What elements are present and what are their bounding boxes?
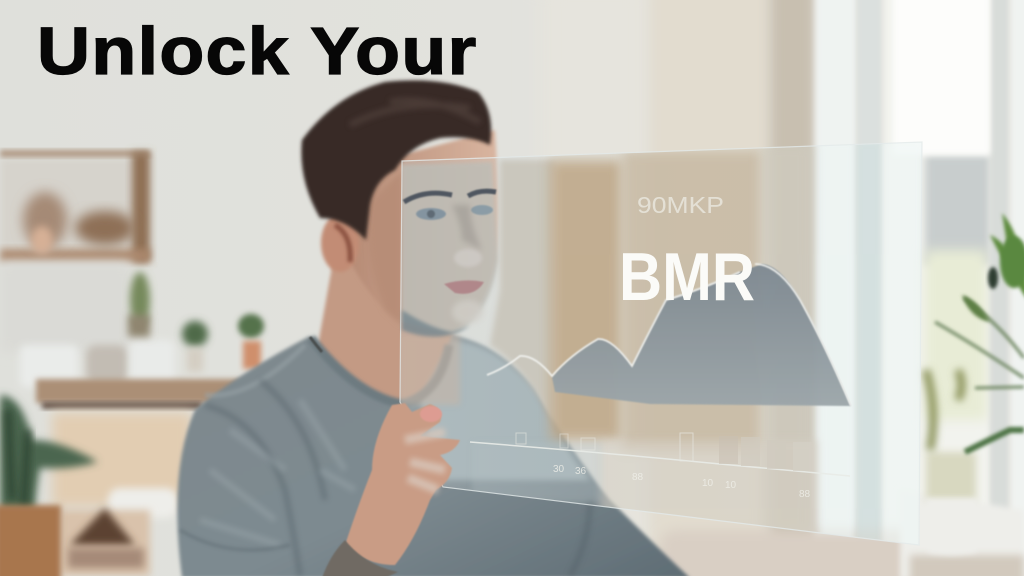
panel tinted face bbox=[402, 162, 498, 335]
man: neck bbox=[318, 250, 455, 410]
background: curtain and window bbox=[540, 0, 1024, 576]
man: hand and forearm bbox=[322, 403, 460, 576]
facial features through glass bbox=[402, 191, 496, 337]
man: dark hair bbox=[301, 80, 491, 240]
panel tick labels: 10 bbox=[702, 478, 714, 489]
panel tick labels: 88 bbox=[632, 472, 644, 483]
panel tick labels: 88 bbox=[799, 489, 811, 500]
panel background cabinet reflection bbox=[490, 160, 555, 430]
shelf unit with objects bbox=[0, 150, 150, 352]
panel tick labels: 36 bbox=[575, 466, 587, 477]
potted plant left bbox=[0, 395, 98, 576]
plant right bbox=[926, 213, 1024, 452]
man: head and face bbox=[321, 130, 498, 334]
sofa right bbox=[660, 452, 1024, 576]
man: grey t-shirt bbox=[177, 335, 690, 576]
title: Unlock Your bbox=[37, 13, 478, 88]
panel tick labels bbox=[553, 464, 811, 500]
area chart bbox=[487, 264, 851, 406]
panel small label: 90MKP bbox=[637, 192, 724, 218]
lower shelf and plants bbox=[20, 272, 264, 576]
panel label: BMR: BMR bbox=[619, 239, 755, 315]
panel tick labels: 30 bbox=[553, 464, 565, 475]
glass panel bbox=[400, 142, 922, 552]
lower panel axis with bars bbox=[470, 433, 850, 476]
panel tick labels: 10 bbox=[725, 480, 737, 491]
